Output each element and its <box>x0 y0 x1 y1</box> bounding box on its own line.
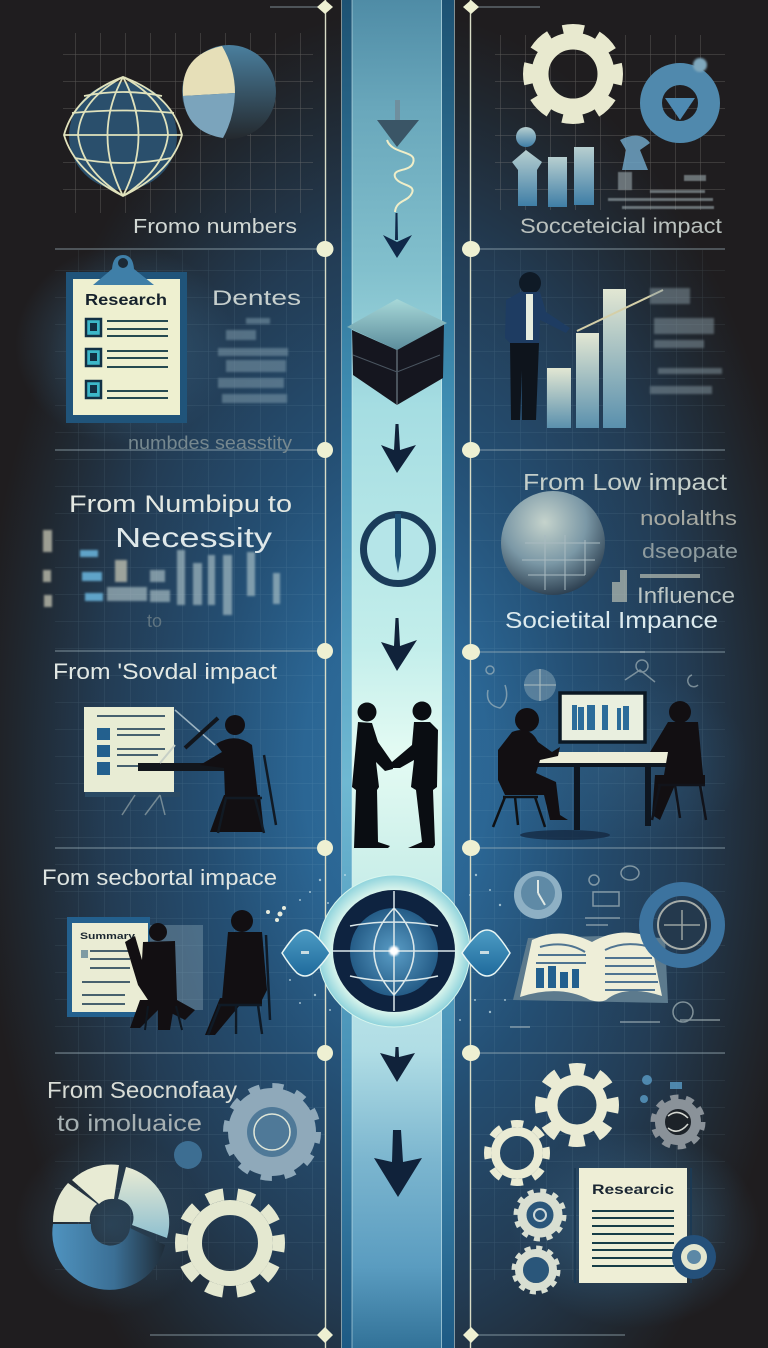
icon: left person <box>493 708 568 827</box>
icon: small globe <box>524 669 556 701</box>
small bars <box>612 570 700 602</box>
panel 5 left: collaborators <box>42 865 286 1035</box>
icon: chair <box>218 755 276 833</box>
icon: wireframe globe <box>64 77 182 196</box>
small dots <box>266 906 286 922</box>
label: societal impact: Socceteicial impact <box>520 215 722 238</box>
icon: large gear <box>181 1194 279 1292</box>
center arrow 3 <box>380 1047 415 1082</box>
icon: gear left <box>488 1124 546 1182</box>
center step 3: power ring <box>364 514 432 584</box>
icon: book cover <box>513 933 668 1003</box>
heading: From Low impact <box>523 469 728 495</box>
icon: large gear <box>528 29 618 119</box>
icon: gear top <box>541 1069 613 1141</box>
garbled text <box>650 288 722 394</box>
heading line 2: to imoluaice <box>57 1110 202 1136</box>
icon: right person <box>650 701 706 820</box>
floating marks <box>486 652 698 708</box>
icon: ring gear <box>646 889 718 961</box>
icon: document: Summary <box>80 931 135 941</box>
panel 1 right: gear and bars <box>512 29 722 238</box>
icon: clipboard: Research <box>85 292 167 309</box>
icon: monitor <box>560 693 645 742</box>
center arrow 2 <box>381 618 417 671</box>
label: numbers necessity: numbdes seasstity <box>128 433 292 453</box>
icon: research document <box>575 1168 691 1283</box>
center arrow 1 <box>381 424 416 473</box>
panel 2 right: presenter and bars <box>505 272 722 428</box>
panel 3 left: from numbers to necessity <box>43 491 292 631</box>
icon: second person <box>205 910 270 1035</box>
heading: From Seocnofaay <box>47 1077 238 1103</box>
side text: Influence <box>637 583 735 608</box>
icon: blue gear <box>227 1087 317 1177</box>
icon: small blob <box>174 1141 202 1169</box>
icon: clock <box>514 871 562 919</box>
floating marks <box>640 1075 682 1103</box>
panel 4 left: desk scene <box>53 659 277 833</box>
pointer <box>577 290 663 331</box>
panel 1 left: globe and pie <box>64 45 297 238</box>
panel 6 right <box>488 1069 716 1292</box>
icon: pie sphere <box>182 45 276 139</box>
icon: seated person <box>200 715 264 832</box>
icon: dotted globe <box>501 491 605 595</box>
icon: first person <box>125 923 195 1030</box>
panel 4 right: monitor scene <box>486 652 706 840</box>
icon: gear bottom <box>514 1248 558 1292</box>
panel 6 left <box>47 1077 317 1292</box>
garbled mini chart <box>218 318 288 403</box>
panel 3 right: globe and impact <box>501 469 738 633</box>
panel 5 right: open book <box>510 866 720 1027</box>
heading: Fom secbortal impace <box>42 865 277 890</box>
mini bar chart <box>43 530 280 615</box>
label: to: to <box>147 611 162 631</box>
center arrow 4 <box>374 1130 422 1197</box>
label: from numbers: Fromo numbers <box>133 216 297 238</box>
icon: gear small <box>516 1191 564 1239</box>
icon: presenter <box>505 272 570 420</box>
floating marks <box>510 866 720 1027</box>
icon: table <box>520 752 680 840</box>
icon: document <box>67 917 203 1017</box>
icon: gear far right <box>654 1098 702 1146</box>
icon: desk and pen <box>122 718 228 815</box>
panel 2 left: research clipboard <box>66 255 301 453</box>
side text: noolalths <box>640 508 737 530</box>
icon: document board <box>84 707 215 797</box>
heading: From 'Sovdal impact <box>53 659 277 684</box>
center step 2: cube <box>347 299 447 405</box>
icon: figure and bars <box>512 127 594 207</box>
center step 5: glowing globe with side nodes <box>282 874 510 1027</box>
icon: donut chart <box>52 1164 169 1290</box>
heading line 2: Necessity <box>115 522 272 553</box>
icon: blue gear <box>651 58 709 132</box>
particles <box>289 874 506 1021</box>
heading: From Numbipu to <box>69 491 292 518</box>
central vertical band <box>342 0 454 1348</box>
center step 4: handshake <box>352 702 438 848</box>
center step 1: arrow and squiggle <box>377 100 419 258</box>
side text: dseopate <box>642 541 738 563</box>
icon: bar chart <box>547 289 626 428</box>
label: devices: Dentes <box>212 287 301 310</box>
icon: clipboard <box>66 255 187 423</box>
small blue icons and noise text <box>608 136 714 209</box>
icon: research document: Researcic <box>592 1181 674 1197</box>
icon: ring gear corner <box>672 1235 716 1279</box>
label: societal impact: Societital Impance <box>505 607 718 633</box>
